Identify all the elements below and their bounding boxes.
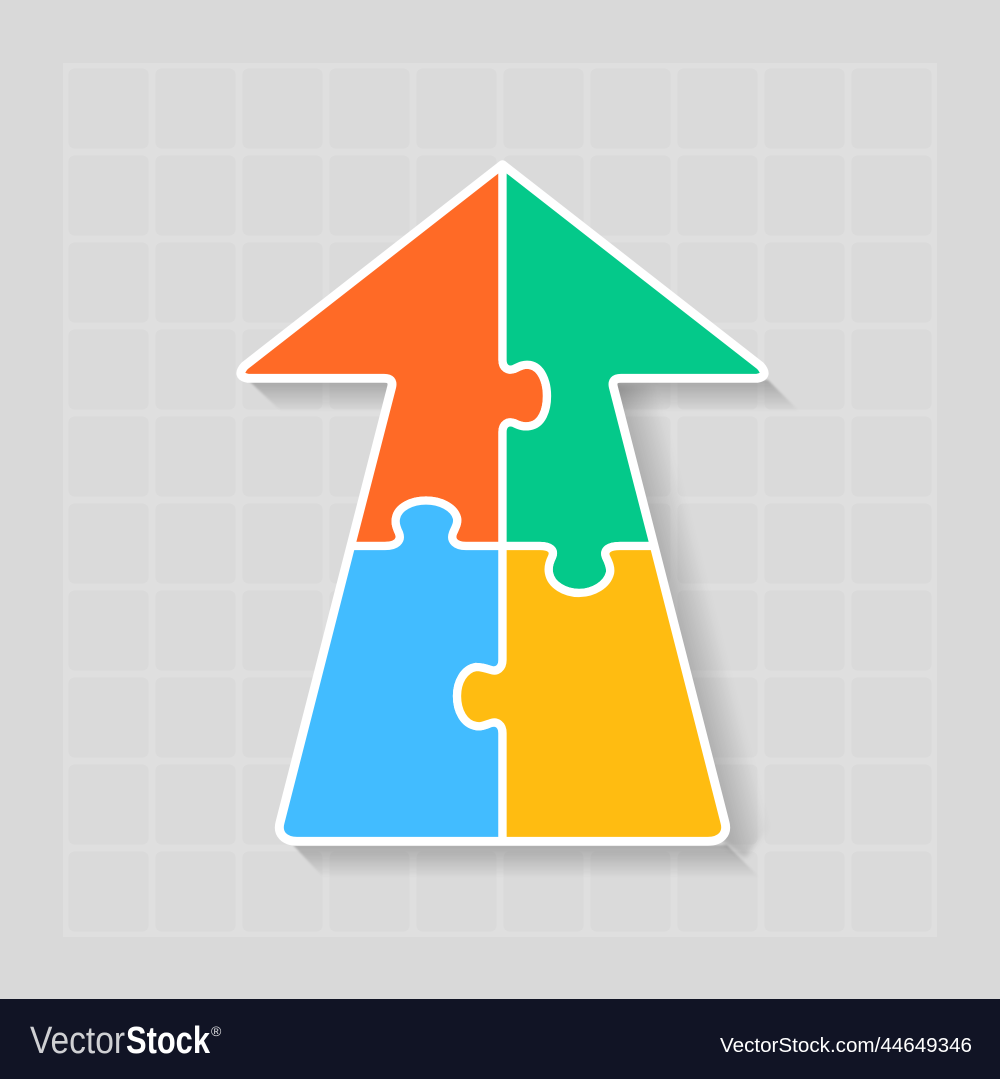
- footer image id: VectorStock.com/44649346: [720, 1035, 972, 1057]
- puzzle piece: orange top left: [241, 165, 547, 546]
- arrow long shadow: [248, 380, 800, 878]
- footer logo: Vector: [30, 1020, 125, 1062]
- footer logo: ®: [211, 1023, 222, 1039]
- puzzle piece: yellow bottom right: [457, 546, 725, 841]
- footer logo: [30, 1020, 222, 1062]
- background grid: [63, 63, 937, 937]
- footer band: [0, 999, 1000, 1079]
- puzzle piece: green top right: [502, 165, 764, 593]
- puzzle piece: blue bottom left: [280, 500, 502, 841]
- arrow white outline: [241, 165, 764, 841]
- footer logo: Stock: [126, 1020, 211, 1062]
- puzzle arrow: [241, 165, 764, 841]
